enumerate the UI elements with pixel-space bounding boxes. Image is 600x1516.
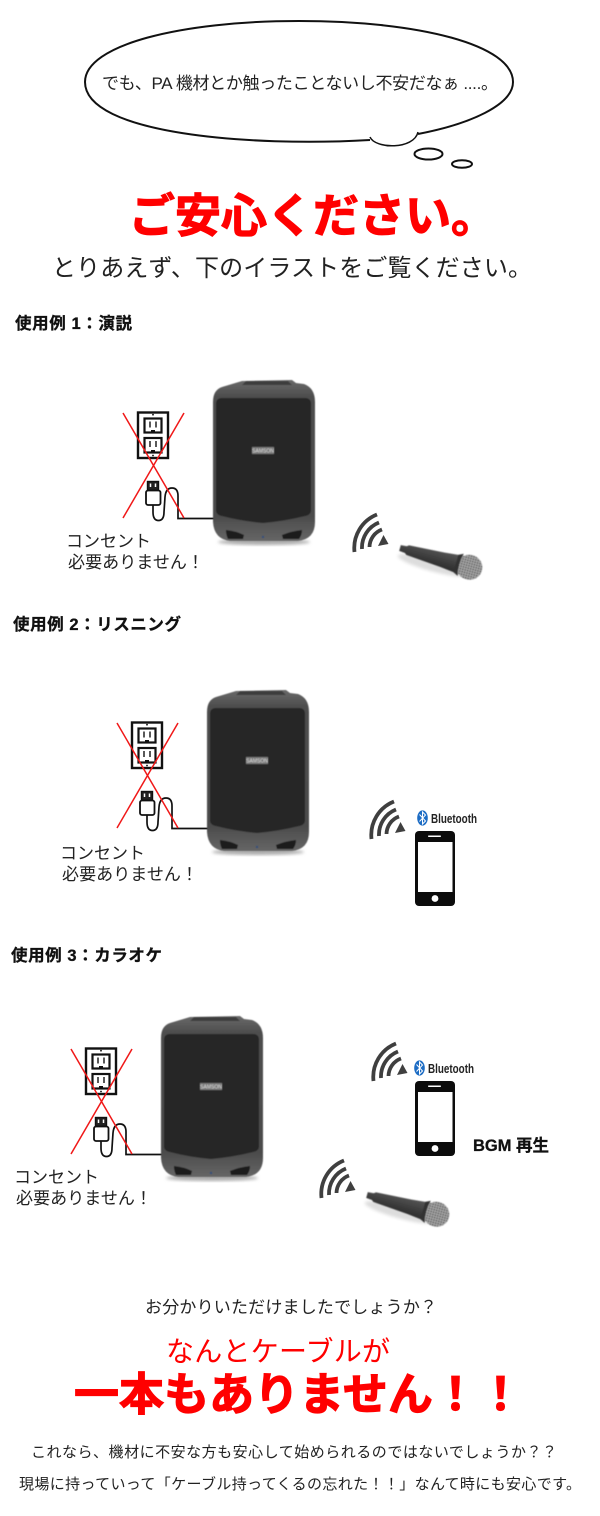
speaker xyxy=(161,1016,263,1181)
wireless icon: phone xyxy=(373,1044,408,1081)
speaker xyxy=(207,690,309,855)
smartphone xyxy=(415,1081,455,1156)
no outlet needed label: コンセント xyxy=(60,844,145,863)
closing text line 1: これなら、機材に不安な方も安心して始められるのではないでしょうか？？ xyxy=(31,1444,557,1461)
panel: example 1 speech xyxy=(66,380,485,584)
no outlet needed label xyxy=(66,532,204,572)
panel: example 3 karaoke xyxy=(14,1016,549,1231)
outlet crossed out with cable xyxy=(123,412,215,520)
title: reassurance: ご安心ください。 xyxy=(129,190,497,242)
question text: お分かりいただけましたでしょうか？ xyxy=(145,1298,437,1317)
no outlet needed label xyxy=(14,1168,152,1208)
microphone xyxy=(396,536,485,584)
smartphone xyxy=(415,831,455,906)
no outlet needed label xyxy=(60,844,198,884)
wireless icon: microphone xyxy=(321,1160,356,1198)
wireless icon xyxy=(371,802,406,839)
panel: example 2 listening xyxy=(60,690,477,906)
microphone xyxy=(363,1183,452,1231)
outlet crossed out with cable xyxy=(117,722,209,830)
no outlet needed label: コンセント xyxy=(66,532,151,551)
thought bubble: でも、PA 機材とか触ったことないし不安だなぁ ....。 xyxy=(102,74,498,93)
red callout: なんとケーブルが xyxy=(166,1336,390,1367)
no outlet needed label: 必要ありません！ xyxy=(62,865,198,884)
closing text line 2: 現場に持っていって「ケーブル持ってくるの忘れた！！」なんて時にも安心です。 xyxy=(19,1475,581,1493)
big red headline: 一本もありません！！ xyxy=(74,1369,523,1420)
bluetooth logo xyxy=(417,810,477,826)
heading: example 2: 使用例 2：リスニング xyxy=(13,614,182,634)
subtitle: とりあえず、下のイラストをご覧ください。 xyxy=(52,255,532,282)
BGM label: BGM 再生 xyxy=(473,1136,549,1155)
no outlet needed label: コンセント xyxy=(14,1168,99,1187)
no outlet needed label: 必要ありません！ xyxy=(16,1189,152,1208)
heading: example 3: 使用例 3：カラオケ xyxy=(11,946,162,965)
speaker xyxy=(213,380,315,545)
no outlet needed label: 必要ありません！ xyxy=(68,553,204,572)
thought bubble xyxy=(85,21,513,168)
wireless icon xyxy=(354,514,388,552)
heading: example 1: 使用例 1：演説 xyxy=(15,314,132,333)
outlet crossed out with cable xyxy=(71,1048,163,1156)
bluetooth logo xyxy=(414,1060,474,1076)
